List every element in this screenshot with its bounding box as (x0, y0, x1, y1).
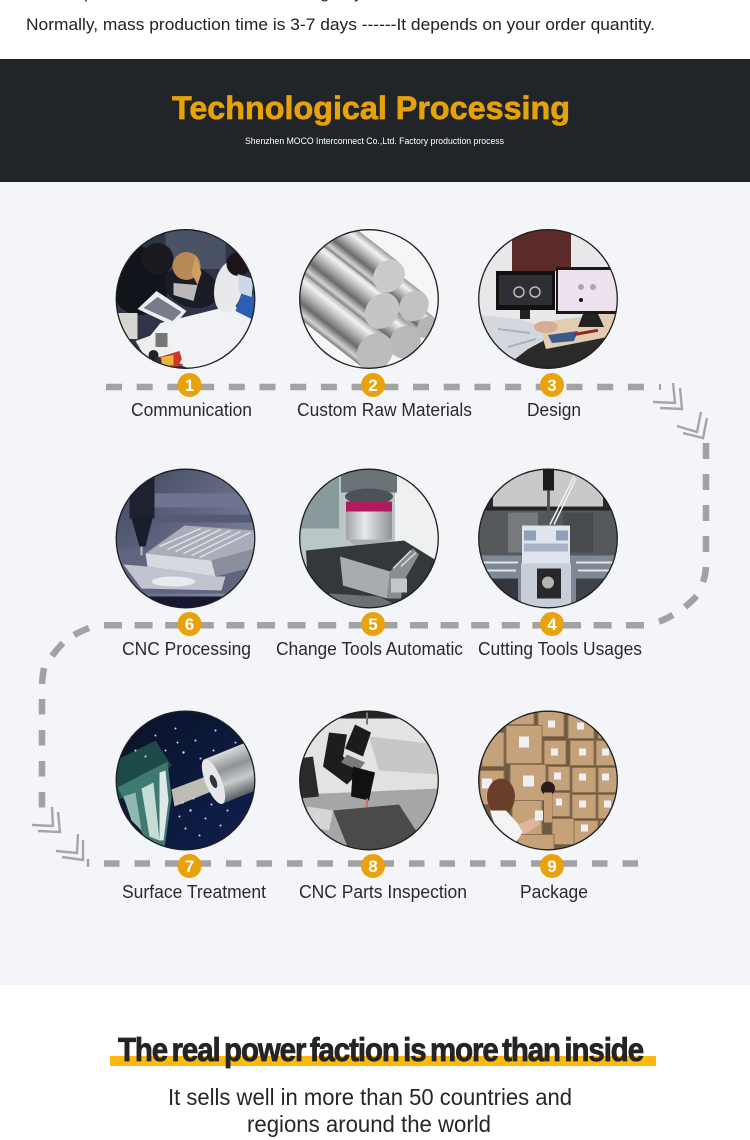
header band (0, 59, 750, 182)
label: Change Tools Automatic: Change Tools Automatic (276, 639, 463, 659)
intro sentence (26, 0, 655, 34)
badge 3: 3 (547, 376, 557, 395)
badge 9 (540, 854, 564, 878)
step 8: CNC Parts Inspection (299, 710, 467, 902)
intro sentence: Normally, mass production time is 3-7 days ------It depends on your order quantity. (26, 15, 655, 34)
badge 4: 4 (547, 615, 557, 634)
label: CNC Processing: CNC Processing (122, 639, 251, 659)
photo: steel rods (299, 229, 439, 369)
badge 7 (178, 854, 202, 878)
badge 6 (178, 612, 202, 636)
label: Communication: Communication (131, 400, 252, 420)
step 7: Surface Treatment (116, 710, 278, 902)
badge 5 (361, 612, 385, 636)
badge 8: 8 (368, 857, 378, 876)
badge 2: 2 (368, 376, 378, 395)
step 2: Custom Raw Materials (298, 229, 472, 416)
badge 4 (540, 612, 564, 636)
step 9: Package (478, 710, 618, 902)
photo: spindle with magenta band (299, 468, 439, 608)
step 6: CNC Processing (116, 468, 256, 659)
badge 8 (361, 854, 385, 878)
badge 9: 9 (547, 857, 557, 876)
photo: cutting with coolant splash (478, 468, 618, 608)
label: CNC Parts Inspection: CNC Parts Inspection (299, 882, 467, 902)
badge 1 (178, 373, 202, 397)
photo: CNC milling aluminium plate (116, 468, 256, 608)
badge 5: 5 (368, 615, 378, 634)
closing heading with yellow highlight: The real power faction is more than inside (118, 1031, 644, 1068)
step 5: Change Tools Automatic (276, 468, 463, 659)
step 4: Cutting Tools Usages (478, 468, 642, 659)
label: Design: Design (527, 400, 581, 420)
photo: meeting seen from above (110, 229, 256, 369)
label: Cutting Tools Usages: Cutting Tools Usages (478, 639, 642, 659)
closing text (168, 1084, 572, 1137)
badge 6: 6 (185, 615, 194, 634)
badge 1: 1 (185, 376, 194, 395)
label: Package: Package (520, 882, 588, 902)
badge 7: 7 (185, 857, 194, 876)
heading: Technological Processing: Technological Processing (172, 90, 570, 126)
sub-heading: Shenzhen MOCO Interconnect Co.,Ltd. Factory production process (245, 136, 504, 147)
panel: process flow (0, 182, 750, 985)
step 3: Design (478, 229, 618, 420)
step 1: Communication (110, 229, 256, 420)
photo: measuring probe over part (299, 710, 439, 850)
photo: workers and stacked cartons (478, 710, 618, 850)
closing text: It sells well in more than 50 countries and (168, 1084, 572, 1110)
badge 2 (361, 373, 385, 397)
photo: sandblasting spray on cylinder (116, 710, 256, 850)
flow path: dashed connector with chevrons (32, 383, 707, 867)
label: Surface Treatment: Surface Treatment (122, 882, 266, 902)
closing text: regions around the world (247, 1111, 491, 1137)
photo: designer at two monitors (478, 229, 618, 369)
label: Custom Raw Materials: Custom Raw Materials (297, 400, 472, 420)
badge 3 (540, 373, 564, 397)
